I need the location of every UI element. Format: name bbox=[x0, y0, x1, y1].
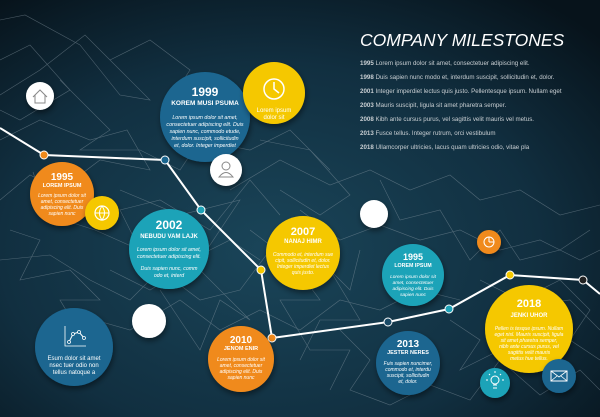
panel: 1995 right: amet, consectetuer bbox=[393, 280, 434, 286]
panel: 2007: NANAJ HIMR bbox=[284, 239, 322, 245]
milestone list: 2001 Integer imperdiet lectus quis justo. Pellentesque ipsum. Nullam eget bbox=[360, 88, 562, 95]
panel: 2013: Fuis sapien nuncimer, bbox=[384, 361, 432, 367]
icon: clock: dolor sit bbox=[263, 115, 285, 121]
panel: 1999: et, dolor. Integer imperdiet bbox=[174, 143, 236, 149]
panel: 2013 bbox=[376, 331, 440, 395]
milestone list: 1995 Lorem ipsum dolor sit amet, consectetuer adipiscing elit. bbox=[360, 60, 530, 67]
panel: 2010: JENOM ENIR bbox=[224, 346, 258, 352]
panel: 2010: Lorem ipsum dolor sit bbox=[217, 357, 266, 363]
panel: 2018 bbox=[485, 285, 573, 373]
milestone list: 1998 Duis sapien nunc modo et, interdum suscipit, sollicitudin et, dolor. bbox=[360, 74, 555, 81]
icon: blank white circle bbox=[132, 304, 166, 338]
panel: chart: nsec tuer odio non bbox=[49, 363, 99, 369]
icon: white circle right bbox=[360, 200, 388, 228]
panel: 2002: NEBUDU VAM LAJK bbox=[140, 234, 198, 240]
panel: 1999: Lorem ipsum dolor sit amet, bbox=[172, 115, 238, 121]
panel: 1995: LOREM IPSUM bbox=[43, 183, 82, 189]
icon: globe bbox=[85, 196, 119, 230]
panel: 1995: amet, consectetuer bbox=[41, 199, 84, 205]
panel: 2013: commodo et, interdu bbox=[385, 367, 431, 373]
panel: 2007: Commodo et, interdum sue bbox=[273, 252, 333, 258]
panel: 2002: Duis sapien nunc, comm bbox=[141, 266, 198, 272]
panel: 2002 bbox=[129, 209, 209, 289]
panel: 2002: consectetuer adipiscing elit. bbox=[137, 254, 201, 260]
milestone list: 2013 Fusce tellus. Integer rutrum, orci vestibulum bbox=[360, 130, 496, 137]
milestone list: 2003 Mauris suscipit, ligula sit amet pharetra semper. bbox=[360, 102, 506, 109]
panel: 2013: suscipit, sollicitudin bbox=[387, 373, 429, 379]
panel: 2007: Integer imperdiet lectus bbox=[277, 264, 329, 270]
icon: lightbulb bbox=[480, 368, 510, 398]
panel: 1995: sapien nunc bbox=[49, 211, 76, 217]
title: COMPANY MILESTONES bbox=[360, 30, 565, 50]
panel: 2018: metus hue tellus. bbox=[510, 356, 548, 362]
panel: 2010: 2010 bbox=[230, 335, 253, 346]
panel: 2010 bbox=[208, 326, 274, 392]
icon: home bbox=[26, 82, 54, 110]
panel: 2018: sagittis velit mauris bbox=[508, 350, 551, 356]
panel: chart bbox=[35, 308, 113, 386]
milestone list: 2008 Kibh ante cursus purus, vel sagittis velit mauris vel metus. bbox=[360, 116, 534, 123]
panel: 2018: sit amet pharetra semper, bbox=[501, 338, 557, 344]
panel: 2018: Pellen is tesque ipsum. Nullam bbox=[495, 326, 563, 332]
panel: 2013: 2013 bbox=[397, 339, 420, 350]
panel: 2002: 2002 bbox=[156, 218, 183, 232]
panel: 2010: amet, consectetuer bbox=[220, 363, 263, 369]
panel: 2002: odo et, interd bbox=[154, 273, 185, 279]
panel: 2018: nibh ante cursus purus, vel bbox=[499, 344, 560, 350]
icon: pie chart bbox=[477, 230, 501, 254]
panel: 1999: KOREM MUSI PSUMA bbox=[171, 100, 239, 107]
panel: 1995: adipiscing elit. Duis bbox=[41, 205, 84, 211]
panel: 1995 right: adipiscing elit. Duis bbox=[392, 286, 434, 292]
panel: 2013: JESTER NERES bbox=[387, 350, 429, 356]
panel: 1999 bbox=[160, 72, 250, 162]
panel: 2018: eget nisl. Mauris suscipit, ligula bbox=[495, 332, 564, 338]
panel: 1995: Lorem ipsum dolor sit bbox=[38, 193, 87, 199]
milestone list: 2018 Ullamcorper ultricies, lacus quam ultricies odio, vitae pla bbox=[360, 144, 530, 151]
panel: 1999: consectetuer adipiscing elit. Duis bbox=[166, 122, 244, 128]
panel: 2010: sapien nunc bbox=[228, 375, 255, 381]
panel: 1999: interdum suscipit, sollicitudin bbox=[171, 136, 239, 142]
panel: 1995 right: 1995 bbox=[403, 252, 423, 262]
panel: 1995 right: sapien nunc bbox=[400, 292, 427, 298]
panel: 1995 bbox=[30, 162, 94, 226]
timeline line bbox=[0, 128, 600, 342]
icon: mail bbox=[542, 359, 576, 393]
panel: 1999: sapien nunc, commodo etude, bbox=[170, 129, 240, 135]
panel: 1999: 1999 bbox=[192, 85, 219, 99]
panel: 1995 right: Lorem ipsum dolor sit bbox=[390, 274, 437, 280]
icon: clock: Lorem ipsum bbox=[257, 108, 291, 114]
panel: 2007: cipit, sollicitudin et, dolor. bbox=[275, 258, 331, 264]
panel: chart: Esum dolor sit amet bbox=[47, 356, 101, 362]
panel: 2010: adipiscing elit. Duis bbox=[220, 369, 263, 375]
panel: 2002: Lorem ipsum dolor sit amet, bbox=[137, 247, 201, 253]
panel: 2018: JENKI UHOR bbox=[510, 313, 548, 319]
milestone list bbox=[360, 60, 562, 151]
icon: clock bbox=[243, 62, 305, 124]
panel: chart: tellus natoque a bbox=[53, 370, 96, 376]
panel: 1995: 1995 bbox=[51, 172, 74, 183]
panel: 2007: 2007 bbox=[291, 226, 315, 238]
panel: 1995 right: LOREM IPSUM bbox=[394, 263, 432, 269]
panel: 2007: quis justo. bbox=[292, 270, 314, 276]
panel: 2013: et, dolor. bbox=[398, 379, 418, 385]
panel: 2007 bbox=[266, 216, 340, 290]
panel: 2018: 2018 bbox=[517, 298, 541, 310]
icon: person bbox=[210, 154, 242, 186]
panel: 1995 right bbox=[382, 244, 444, 306]
